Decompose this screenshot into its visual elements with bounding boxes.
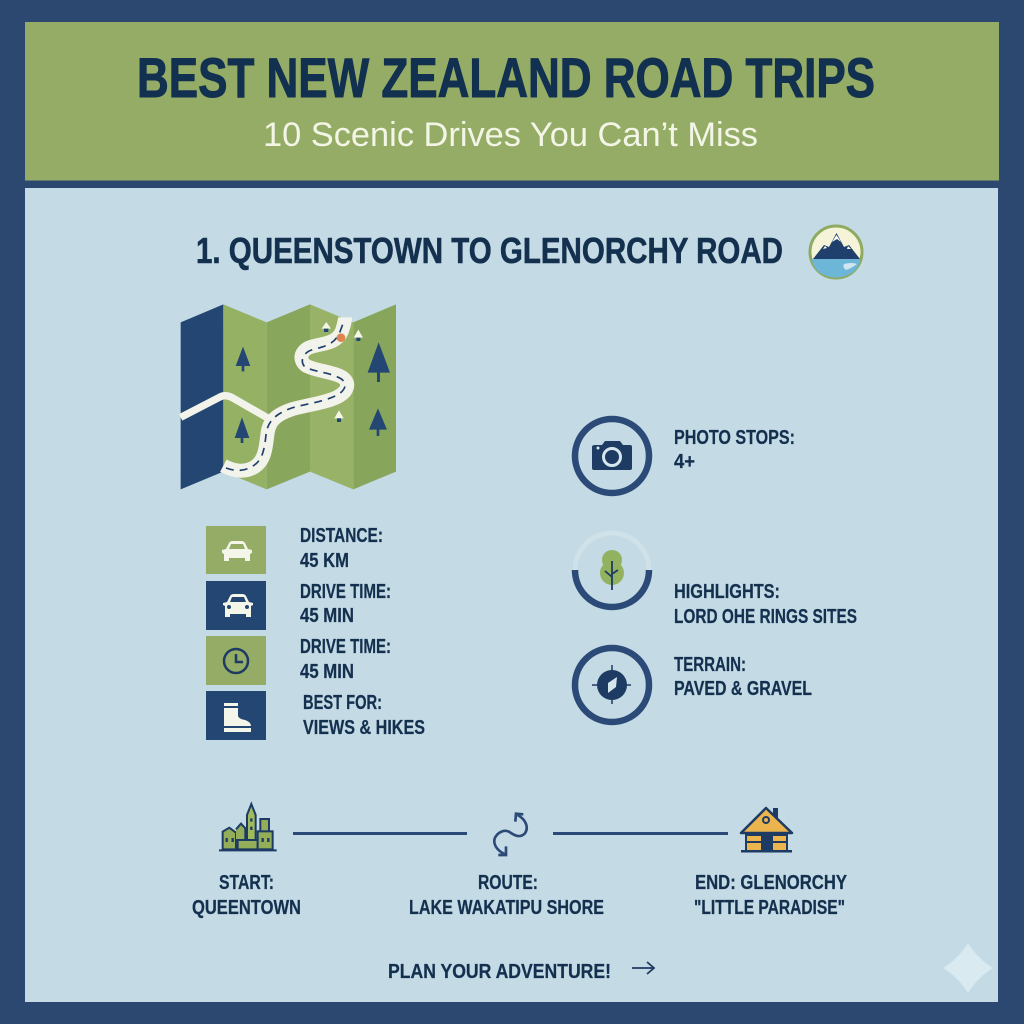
label: END: GLENORCHY: [695, 872, 848, 894]
route step: end: [694, 808, 848, 919]
label: BEST FOR:: [303, 692, 382, 714]
route step: end: "LITTLE PARADISE": [694, 897, 845, 919]
stat: best for: VIEWS & HIKES: [303, 717, 425, 739]
label: ROUTE:: [478, 872, 538, 894]
label: HIGHLIGHTS:: [674, 581, 780, 603]
stat: drive time clock: 45 MIN: [300, 661, 354, 683]
icon: clock: [224, 649, 248, 673]
connector line: [293, 832, 467, 835]
trees: [235, 342, 390, 443]
connector line: [553, 832, 728, 835]
icon: mountain and lake badge: [810, 226, 862, 278]
stat: distance: 45 KM: [300, 550, 349, 572]
item: highlights: [575, 533, 857, 628]
icon: boot: [224, 703, 251, 732]
location pin: [337, 333, 345, 342]
panel: header banner: [25, 22, 999, 180]
stat: best for: [206, 691, 425, 740]
icon: winding arrow: [494, 814, 527, 855]
route step: route: [409, 814, 604, 919]
winding road: [223, 317, 347, 471]
icon: city skyline: [219, 804, 277, 850]
section heading: 1. QUEENSTOWN TO GLENORCHY ROAD: [196, 230, 783, 271]
icon: cabin: [741, 808, 792, 852]
call to action: PLAN YOUR ADVENTURE!: [388, 961, 611, 983]
item: photo stops: 4+: [674, 451, 695, 473]
item: terrain: PAVED & GRAVEL: [674, 678, 812, 700]
arrow: [632, 962, 654, 974]
label: START:: [219, 872, 274, 894]
small white markers: [322, 322, 363, 422]
route step: start: QUEENTOWN: [192, 897, 301, 919]
stat: drive time: 45 MIN: [300, 605, 354, 627]
panel: main content background: [25, 188, 998, 1002]
label: DRIVE TIME:: [300, 581, 391, 603]
stat: distance: [206, 525, 383, 574]
route step: start: [192, 804, 301, 919]
item: highlights: LORD OHE RINGS SITES: [674, 606, 857, 628]
road branch: [181, 396, 270, 419]
icon: car: [223, 594, 253, 617]
icon: camera: [592, 441, 632, 470]
item: photo stops: [575, 419, 795, 493]
label: TERRAIN:: [674, 654, 746, 676]
icon: sparkle: [943, 943, 993, 993]
label: DRIVE TIME:: [300, 636, 391, 658]
label: DISTANCE:: [300, 525, 383, 547]
subtitle: 10 Scenic Drives You Can’t Miss: [263, 116, 758, 154]
road centre dashes: [226, 319, 345, 470]
icon: compass: [592, 665, 631, 704]
map illustration: [181, 304, 396, 489]
icon: car: [222, 541, 252, 561]
item: terrain: [575, 648, 812, 722]
route step: route: LAKE WAKATIPU SHORE: [409, 897, 604, 919]
stat: drive time: [206, 581, 391, 630]
stat: drive time clock: [206, 636, 391, 685]
label: PHOTO STOPS:: [674, 427, 795, 449]
icon: tree: [600, 550, 624, 590]
